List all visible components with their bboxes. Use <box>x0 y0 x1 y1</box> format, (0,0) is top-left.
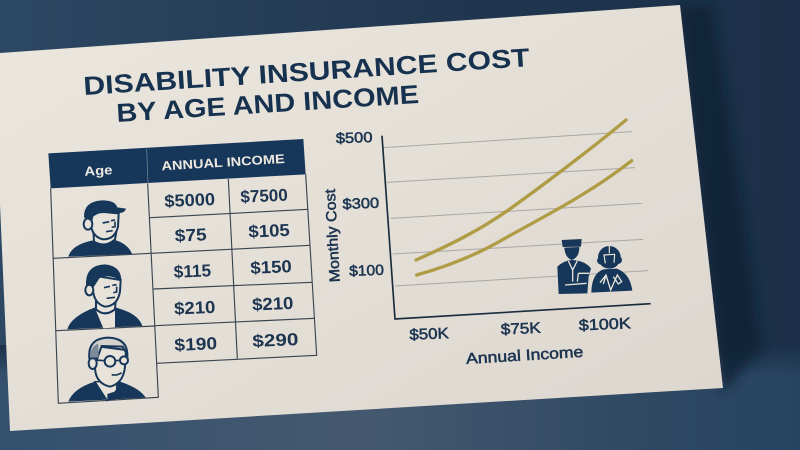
table values: $75 <box>174 224 208 246</box>
background floor <box>0 345 800 450</box>
title: BY AGE AND INCOME <box>115 79 420 128</box>
y axis title: Monthly Cost <box>323 189 344 283</box>
table values: $190 <box>174 333 217 355</box>
x axis labels <box>409 315 632 344</box>
icon: young person with cap <box>68 200 132 257</box>
y axis labels: $100 <box>349 263 384 280</box>
icon: two professionals <box>557 239 632 294</box>
icon: middle-aged man <box>67 264 142 329</box>
x axis labels: $50K <box>409 325 450 344</box>
table grid <box>51 174 317 403</box>
table header <box>48 139 306 188</box>
table values: $290 <box>252 329 299 351</box>
line chart <box>323 120 651 368</box>
x axis title: Annual Income <box>466 344 584 368</box>
table values: $5000 <box>164 189 215 211</box>
table <box>48 139 317 403</box>
table values: $7500 <box>240 185 288 207</box>
gridlines <box>383 132 648 286</box>
table header: Age <box>84 162 113 179</box>
table values: $105 <box>248 220 291 242</box>
y axis labels: $300 <box>342 196 379 213</box>
x axis labels: $75K <box>500 320 542 339</box>
y axis labels <box>336 130 384 280</box>
table values: $115 <box>173 260 212 282</box>
table header: ANNUAL INCOME <box>161 152 285 173</box>
curve: lower cost line <box>417 161 632 275</box>
table values: $210 <box>252 293 294 315</box>
table values <box>164 185 299 355</box>
floor blend <box>0 345 800 375</box>
title: DISABILITY INSURANCE COST <box>82 42 531 101</box>
title <box>82 42 531 128</box>
x axis labels: $100K <box>578 315 632 334</box>
table values: $150 <box>250 256 292 278</box>
chart axes <box>382 136 651 319</box>
paper shadow <box>680 5 762 392</box>
table values: $210 <box>174 297 216 319</box>
curve: upper cost line <box>416 120 626 260</box>
y axis labels: $500 <box>336 130 373 147</box>
icon: older man with glasses <box>68 338 146 402</box>
